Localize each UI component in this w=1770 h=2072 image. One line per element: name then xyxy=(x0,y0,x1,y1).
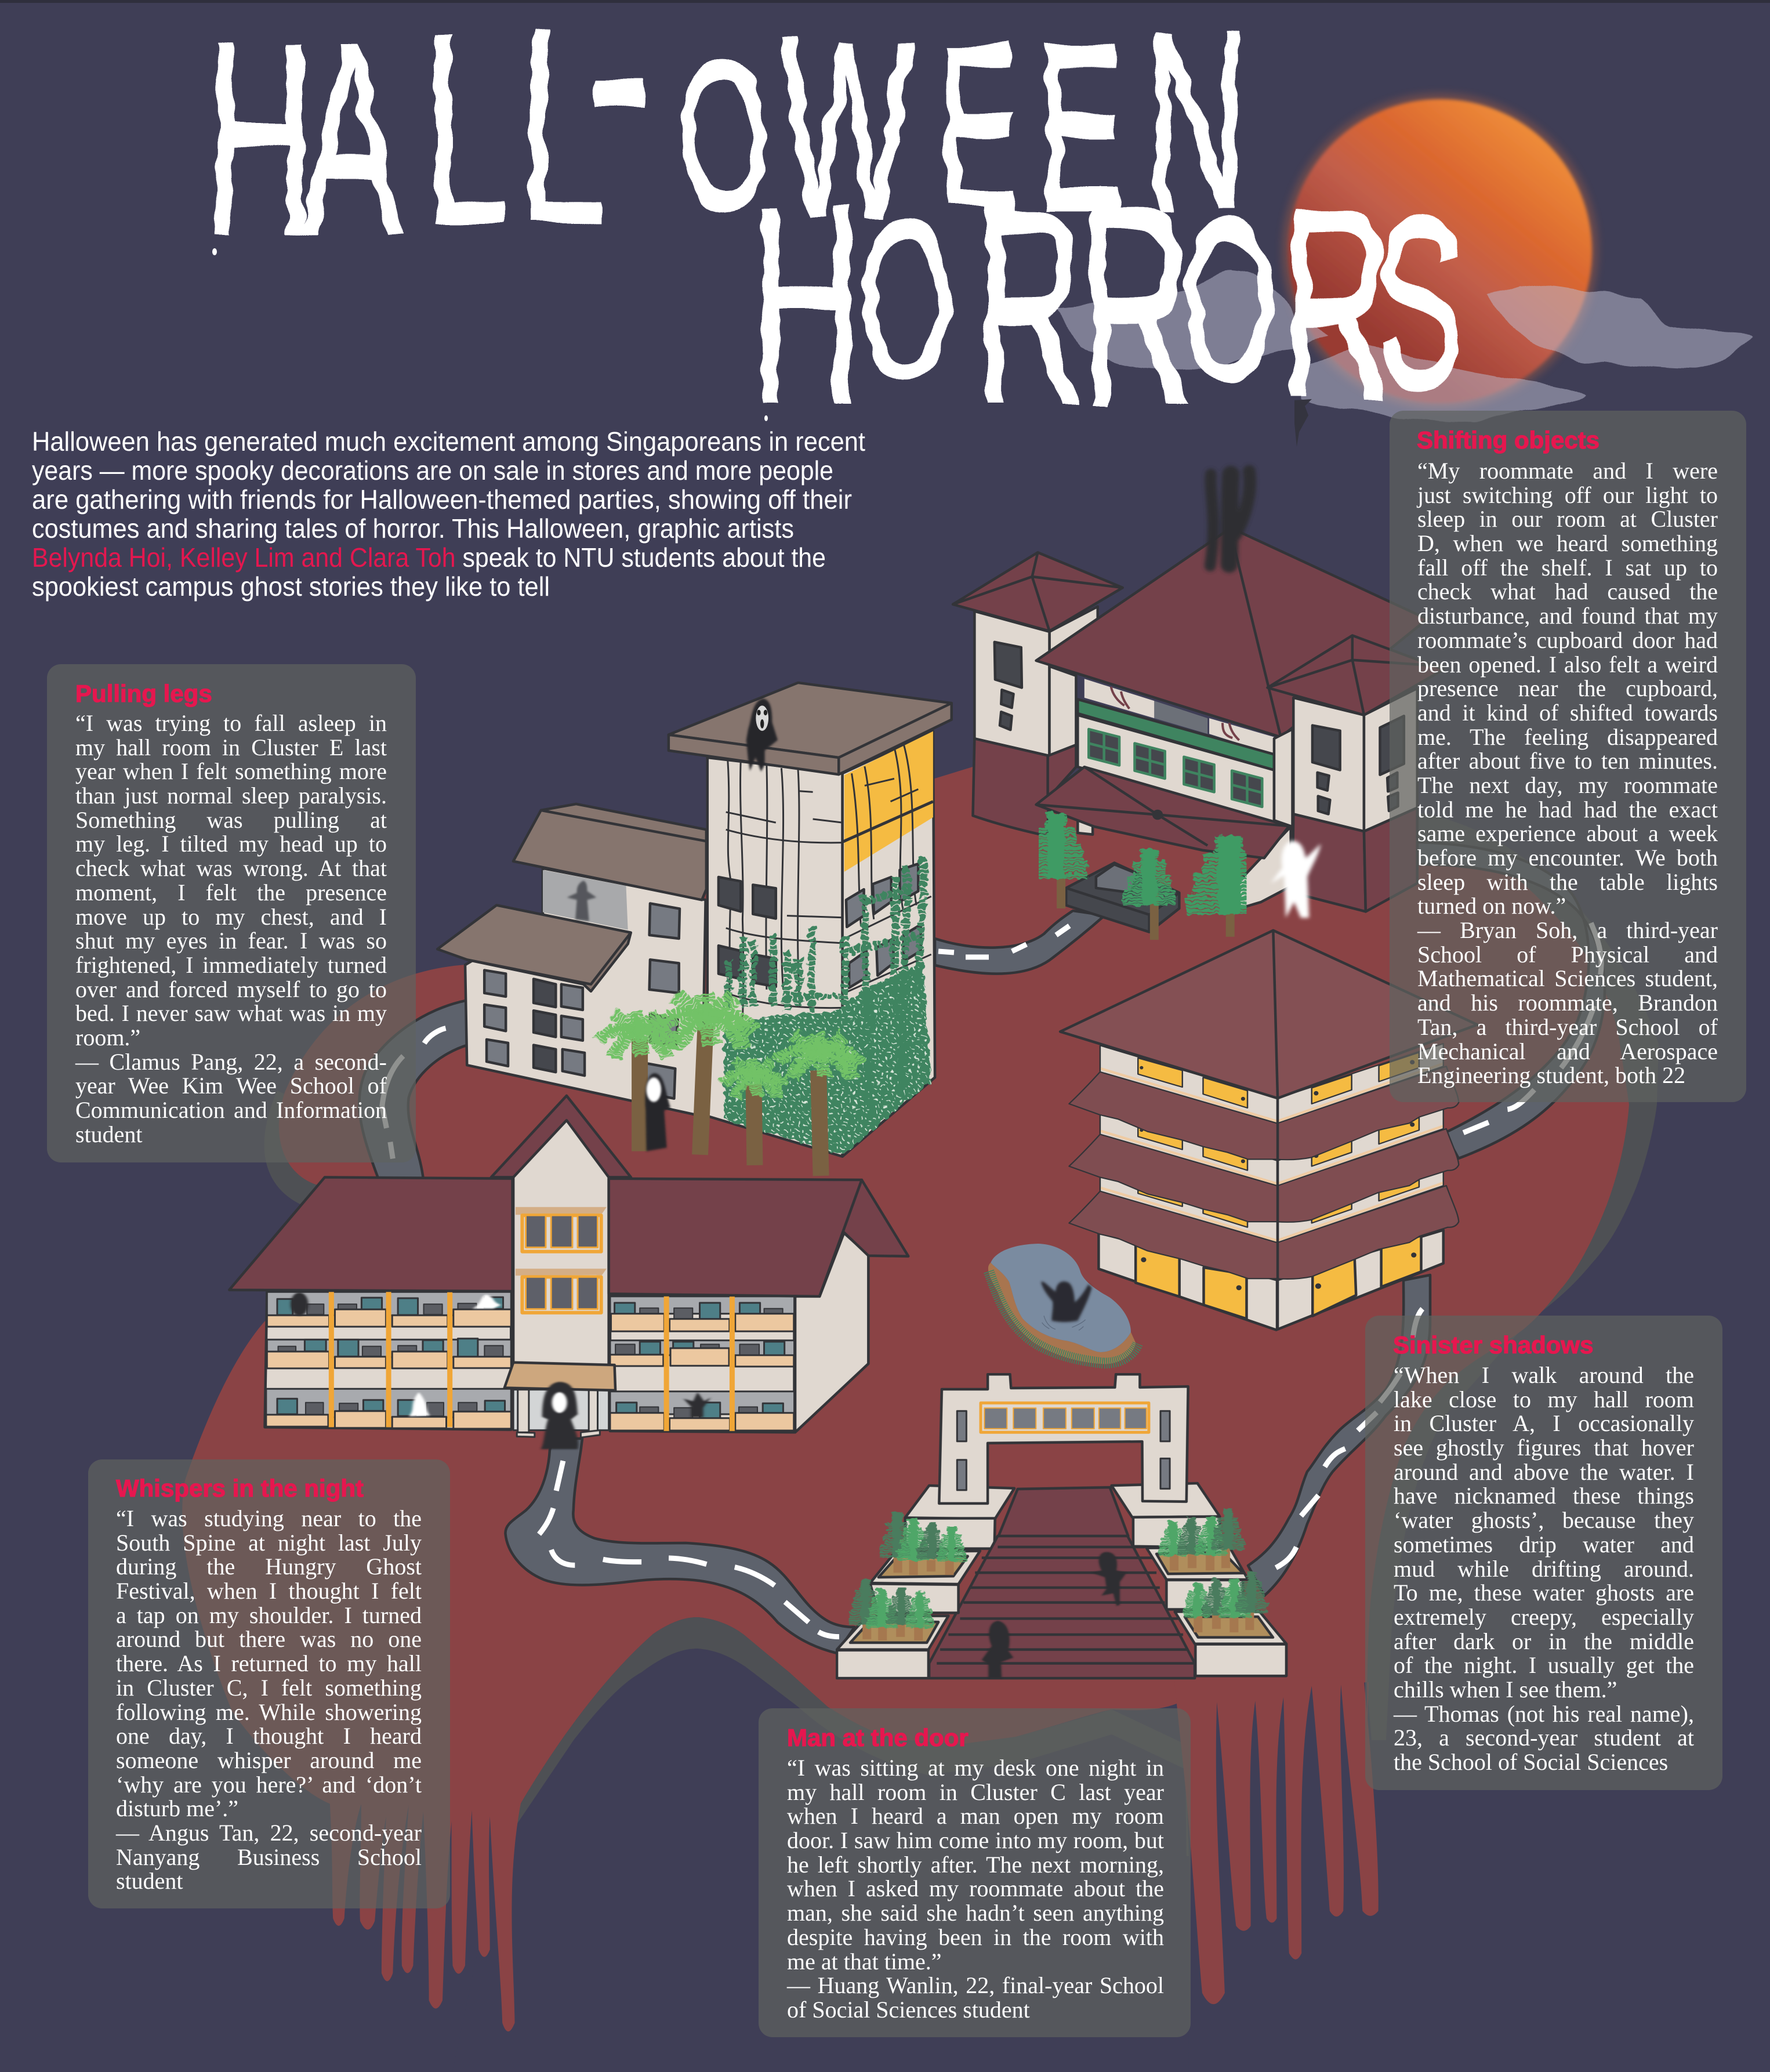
quote: Sinister shadows: extremely creepy, especially xyxy=(1394,1604,1694,1630)
quote: Whispers in the night: following me. While showering xyxy=(116,1698,422,1725)
quote: Whispers in the night: — Angus Tan, 22, second-year xyxy=(116,1820,422,1846)
gate arch xyxy=(939,1374,1188,1504)
quote: Pulling legs: Something was pulling at xyxy=(75,807,387,833)
entrance xyxy=(505,1363,615,1437)
ghosts on the balconies xyxy=(291,1292,711,1417)
tower walls xyxy=(708,731,935,1157)
palm trees xyxy=(599,994,861,1176)
title: R xyxy=(1282,151,1391,459)
quote: Whispers in the night: Festival, when I thought I felt xyxy=(116,1578,422,1604)
ghost children on stairs xyxy=(982,1552,1126,1678)
quote: Pulling legs: over and forced myself to go to xyxy=(75,976,387,1002)
ground: arch shadow xyxy=(499,1617,1189,1856)
panel: Whispers in the night xyxy=(88,1459,450,1908)
roofs of low wing xyxy=(437,804,706,991)
right facade xyxy=(610,1296,795,1432)
quote: Shifting objects: The next day, my roommate xyxy=(1417,772,1718,798)
campus gate and stairs xyxy=(837,1374,1286,1678)
right tower xyxy=(1267,636,1444,911)
pond with water ghost xyxy=(988,1244,1138,1364)
ghost: black shadow on roof peak xyxy=(1210,472,1250,566)
tower cladding lines xyxy=(726,744,933,1024)
quote: Shifting objects: sleep in our room at Cluster xyxy=(1417,506,1718,532)
main roof ridge xyxy=(1234,547,1281,737)
ivy xyxy=(724,858,931,1155)
ground: left lobe shadow xyxy=(264,1091,371,1212)
eaves and bands xyxy=(1069,1044,1459,1279)
quote: Sinister shadows: — Thomas (not his real name), xyxy=(1394,1701,1694,1727)
clouds xyxy=(1054,269,1750,420)
quote: Pulling legs: room.” xyxy=(75,1024,140,1051)
quote: Man at the door: “I was sitting at my desk one night in xyxy=(787,1755,1164,1781)
panel: Pulling legs xyxy=(47,664,416,1162)
quote: Whispers in the night: ‘why are you here?’ and ‘don’t xyxy=(116,1772,422,1798)
quote: Shifting objects: disturbance, and found that my xyxy=(1417,603,1718,629)
quote: Sinister shadows: after dark or in the middle xyxy=(1394,1628,1694,1654)
top edge line xyxy=(0,0,1770,3)
panel: Sinister shadows xyxy=(1365,1316,1722,1790)
quote: Shifting objects: — Bryan Soh, a third-year xyxy=(1417,917,1718,943)
quote: Shifting objects: and his roommate, Brandon xyxy=(1417,990,1718,1016)
title: E xyxy=(937,0,1022,257)
quote: Shifting objects: me. The feeling disappeared xyxy=(1417,724,1718,750)
trees xyxy=(1056,813,1230,940)
moon xyxy=(1282,93,1598,409)
quote: Whispers in the night: South Spine at night last July xyxy=(116,1530,422,1556)
title: R xyxy=(1082,151,1191,459)
quote: Whispers in the night: there. As I returned to my hall xyxy=(116,1650,422,1676)
road: pyramid block to gate xyxy=(1248,1275,1430,1596)
side wing xyxy=(795,1233,868,1432)
quote: Pulling legs: my hall room in Cluster E last xyxy=(75,734,387,760)
quote: Whispers in the night: student xyxy=(116,1868,183,1894)
quote: Whispers in the night: Nanyang Business School xyxy=(116,1844,422,1870)
quote: Sinister shadows: around and above the water. I xyxy=(1394,1459,1694,1485)
quote: Shifting objects: Mechanical and Aerospace xyxy=(1417,1038,1718,1064)
quote: Pulling legs: student xyxy=(75,1121,143,1147)
title specks xyxy=(212,248,768,421)
quote: Sinister shadows: of the night. I usually get the xyxy=(1394,1652,1694,1678)
quote: Shifting objects: check what had caused the xyxy=(1417,578,1718,604)
heading: Pulling legs: Pulling legs xyxy=(75,680,212,707)
porch and planter xyxy=(1036,767,1291,932)
quote: Sinister shadows: sometimes drip water and xyxy=(1394,1531,1694,1557)
quote: Shifting objects: sleep with the table lights xyxy=(1417,869,1718,895)
quote: Man at the door: my hall room in Cluster C last year xyxy=(787,1779,1164,1805)
quote: Man at the door: man, she said she hadn’t seen anything xyxy=(787,1900,1164,1926)
quote: Sinister shadows xyxy=(1393,1362,1694,1775)
quote: Man at the door xyxy=(786,1755,1164,2023)
tower roof xyxy=(669,683,952,774)
quote: Pulling legs: bed. I never saw what was in my xyxy=(75,1000,387,1026)
blood drips left xyxy=(329,1799,521,2031)
quote: Shifting objects: and it kind of shifted towards xyxy=(1417,700,1718,726)
ghost: scream figure on roof xyxy=(746,698,778,771)
main roof xyxy=(1036,528,1427,737)
quote: Man at the door: of Social Sciences student xyxy=(787,1997,1030,2023)
title: E xyxy=(1038,0,1123,257)
ground: red campus grounds xyxy=(182,763,1629,1806)
building: tower and low wing xyxy=(437,683,952,1176)
quote: Shifting objects: same experience about a week xyxy=(1417,820,1718,846)
road: dorm to pyramid block xyxy=(1417,842,1605,1158)
quote: Sinister shadows: “When I walk around the xyxy=(1394,1362,1694,1388)
gable xyxy=(491,1096,631,1178)
quote: Shifting objects: been opened. I also felt a weird xyxy=(1417,651,1718,678)
ground: right shadow band xyxy=(1334,812,1659,1740)
quote: Sinister shadows: see ghostly figures that hover xyxy=(1394,1435,1694,1461)
quote: Shifting objects: turned on now.” xyxy=(1417,893,1566,919)
quote: Whispers in the night xyxy=(116,1505,422,1894)
quote: Whispers in the night: disturb me’.” xyxy=(116,1795,238,1821)
heading: Man at the door: Man at the door xyxy=(787,1724,969,1751)
quote: Shifting objects xyxy=(1416,458,1718,1088)
intro text: are gathering with friends for Halloween-themed parties, showing off their xyxy=(32,484,852,515)
central tower xyxy=(513,1120,609,1365)
quote: Pulling legs: “I was trying to fall asleep in xyxy=(75,710,387,736)
heading: Sinister shadows: Sinister shadows xyxy=(1393,1331,1593,1359)
building: front residential hall xyxy=(229,1096,908,1449)
planter trees xyxy=(865,1509,1252,1640)
title: S xyxy=(1374,167,1464,439)
quote: Pulling legs: year when I felt something more xyxy=(75,758,387,784)
ghost: nun at entrance xyxy=(541,1382,578,1449)
left facade xyxy=(265,1291,511,1430)
title: O xyxy=(1180,172,1277,425)
quote: Shifting objects: Mathematical Sciences student, xyxy=(1417,965,1718,991)
quote: Shifting objects: roommate’s cupboard door had xyxy=(1417,627,1718,653)
quote: Shifting objects: D, when we heard something xyxy=(1417,530,1718,556)
quote: Man at the door: when I asked my roommate about the xyxy=(787,1875,1164,1901)
quote: Man at the door: door. I saw him come into my room, but xyxy=(787,1827,1164,1853)
stair platforms xyxy=(905,1483,1220,1549)
intro text xyxy=(32,426,865,602)
quote: Shifting objects: Engineering student, both 22 xyxy=(1417,1062,1685,1088)
quote: Shifting objects: Tan, a third-year School of xyxy=(1417,1014,1718,1040)
heading: Shifting objects: Shifting objects xyxy=(1417,426,1599,454)
stairs xyxy=(929,1487,1195,1678)
quote: Sinister shadows: in Cluster A, I occasionally xyxy=(1394,1410,1694,1436)
planters xyxy=(837,1548,1286,1678)
quote: Pulling legs: frightened, I immediately turned xyxy=(75,952,387,978)
road: tower to dorm xyxy=(935,911,1105,974)
tower windows xyxy=(719,864,921,988)
intro text: costumes and sharing tales of horror. This Halloween, graphic artists xyxy=(32,513,794,544)
quote: Whispers in the night: around but there was no one xyxy=(116,1626,422,1652)
quote: Pulling legs: — Clamus Pang, 22, a second- xyxy=(75,1049,387,1075)
title xyxy=(206,0,1464,459)
quote: Whispers in the night: in Cluster C, I felt something xyxy=(116,1675,422,1701)
quote: Pulling legs: Communication and Information xyxy=(75,1097,387,1123)
panel: Shifting objects xyxy=(1390,411,1746,1102)
quote: Whispers in the night: during the Hungry Ghost xyxy=(116,1553,422,1580)
quote: Shifting objects: School of Physical and xyxy=(1417,941,1718,968)
quote: Sinister shadows: ‘water ghosts’, because they xyxy=(1394,1507,1694,1533)
pyramid roof xyxy=(1060,930,1477,1098)
quote: Sinister shadows: mud while drifting around. xyxy=(1394,1556,1694,1581)
ghost: hooded figure by palms xyxy=(645,1073,670,1151)
low wing walls xyxy=(465,868,706,1116)
quote: Sinister shadows: have nicknamed these things xyxy=(1394,1483,1694,1509)
title: R xyxy=(974,151,1084,459)
quote: Pulling legs: move up to my chest, and I xyxy=(75,904,387,929)
left and right roofs xyxy=(229,1178,908,1296)
quote: Pulling legs: shut my eyes in fear. I was so xyxy=(75,928,387,954)
quote: Man at the door: despite having been in the room with xyxy=(787,1924,1164,1950)
title: O xyxy=(858,172,955,425)
quote: Pulling legs: moment, I felt the presence xyxy=(75,879,387,905)
title: H xyxy=(751,148,862,459)
quote: Man at the door: he left shortly after. The next morning, xyxy=(787,1852,1164,1878)
quote: Pulling legs: check what was wrong. At that xyxy=(75,855,387,881)
blood drips right xyxy=(1174,1677,1379,2004)
ink splatter under cloud xyxy=(1294,399,1312,447)
quote: Sinister shadows: To me, these water ghosts are xyxy=(1394,1580,1694,1606)
quote: Sinister shadows: chills when I see them.” xyxy=(1394,1676,1617,1702)
quote: Shifting objects: “My roommate and I were xyxy=(1417,458,1718,484)
intro text: years — more spooky decorations are on sale in stores and more people xyxy=(32,455,833,486)
base storey xyxy=(1098,1230,1443,1330)
building: pyramid-roof block xyxy=(1060,930,1477,1330)
quote: Shifting objects: before my encounter. We both xyxy=(1417,845,1718,871)
quote: Shifting objects: told me he had had the exact xyxy=(1417,796,1718,823)
quote: Shifting objects: fall off the shelf. I sat up to xyxy=(1417,555,1718,581)
quote: Sinister shadows: the School of Social Sciences xyxy=(1394,1749,1668,1775)
road: hall entrance to gate xyxy=(505,1439,854,1653)
intro text: Halloween has generated much excitement among Singaporeans in recent xyxy=(32,426,865,457)
intro text: spookiest campus ghost stories they like to tell xyxy=(32,571,550,602)
heading: Whispers in the night: Whispers in the night xyxy=(116,1475,364,1502)
quote: Whispers in the night: someone whisper around me xyxy=(116,1747,422,1773)
quote: Pulling legs xyxy=(75,710,387,1147)
ground: navy arch cut xyxy=(452,1649,1189,2072)
road: left building to hall xyxy=(359,1001,468,1181)
corner line xyxy=(1273,932,1278,1330)
quote: Shifting objects: after about five to ten minutes. xyxy=(1417,748,1718,774)
quote: Whispers in the night: a tap on my shoulder. I turned xyxy=(116,1602,422,1628)
panel: Man at the door xyxy=(759,1708,1191,2037)
title: O xyxy=(678,15,770,253)
quote: Whispers in the night: “I was studying near to the xyxy=(116,1505,422,1531)
intro text: Belynda Hoi, Kelley Lim and Clara Toh speak to NTU students about the xyxy=(32,542,826,573)
quote: Man at the door: me at that time.” xyxy=(787,1948,942,1975)
quote: Sinister shadows: lake close to my hall room xyxy=(1394,1386,1694,1412)
quote: Man at the door: — Huang Wanlin, 22, final-year School xyxy=(787,1972,1164,1998)
quote: Pulling legs: my leg. I tilted my head up to xyxy=(75,831,387,857)
main facade xyxy=(1048,666,1293,827)
quote: Pulling legs: than just normal sleep paralysis. xyxy=(75,783,387,809)
quote: Shifting objects: presence near the cupboard, xyxy=(1417,675,1718,701)
quote: Shifting objects: just switching off our light to xyxy=(1417,482,1718,508)
building: dorm block with towers xyxy=(953,472,1444,940)
quote: Pulling legs: year Wee Kim Wee School of xyxy=(75,1073,387,1099)
quote: Man at the door: when I heard a man open my room xyxy=(787,1803,1164,1829)
quote: Sinister shadows: 23, a second-year student at xyxy=(1394,1725,1694,1751)
quote: Whispers in the night: one day, I thought I heard xyxy=(116,1723,422,1749)
left tower xyxy=(953,552,1123,836)
ghost: white figure xyxy=(1271,841,1321,918)
